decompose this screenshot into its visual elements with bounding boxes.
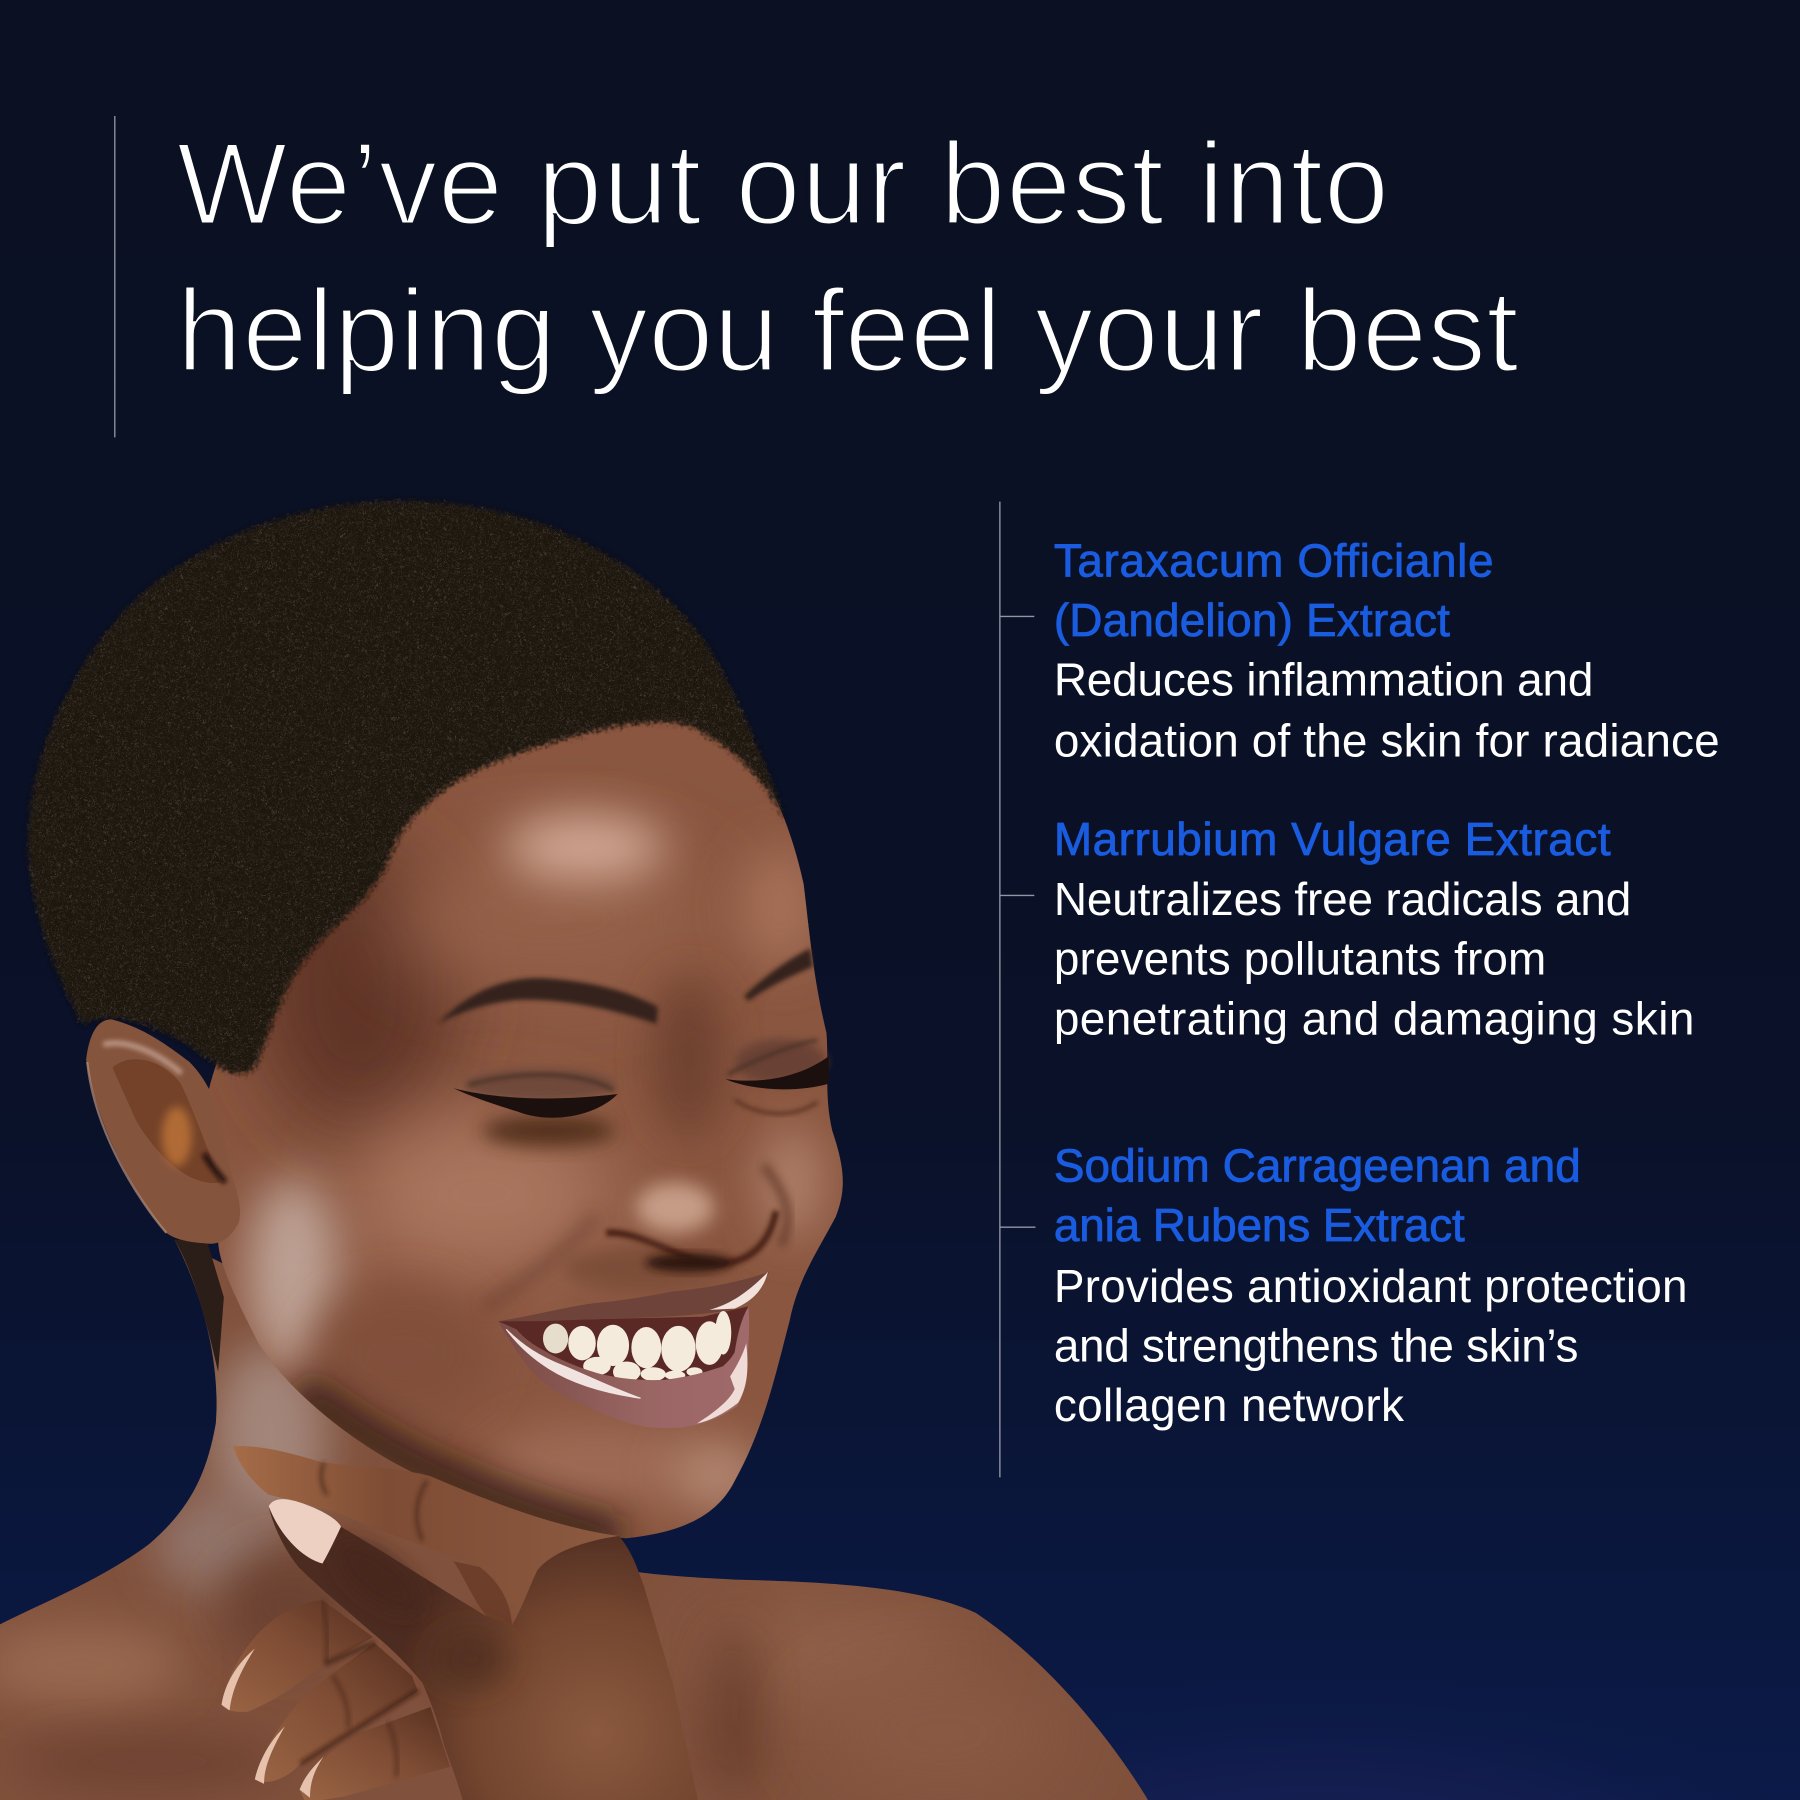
ingredient: dandelion extract: Taraxacum Officianle: [1054, 534, 1493, 586]
hand on chin: [222, 1446, 698, 1800]
right eye: [726, 1039, 829, 1113]
ingredient: sodium carrageenan: [1054, 1139, 1688, 1431]
lower lip: [498, 1306, 749, 1428]
title: We’ve put our best into: [177, 118, 1389, 249]
ingredient: dandelion extract: [1054, 534, 1720, 767]
ingredient: sodium carrageenan: ania Rubens Extract: [1054, 1199, 1465, 1251]
ingredients bracket: [1000, 502, 1035, 1477]
ingredient: marrubium vulgare: penetrating and damaging skin: [1054, 992, 1694, 1044]
ingredient: marrubium vulgare: Marrubium Vulgare Extract: [1054, 813, 1611, 865]
teeth: [543, 1311, 731, 1382]
under-chin shadow: [298, 1389, 620, 1538]
ingredient: marrubium vulgare: Neutralizes free radicals and: [1054, 873, 1631, 925]
fingernails: [222, 1648, 324, 1798]
ear: [86, 1019, 240, 1244]
left eye: [453, 1069, 618, 1147]
smile: [498, 1272, 769, 1428]
ingredient: marrubium vulgare: [1054, 813, 1694, 1044]
ingredient: sodium carrageenan: Sodium Carrageenan and: [1054, 1139, 1581, 1191]
ingredient: sodium carrageenan: collagen network: [1054, 1379, 1405, 1431]
philtrum: [562, 1248, 723, 1289]
ingredient: dandelion extract: (Dandelion) Extract: [1054, 594, 1450, 646]
neck and shoulders: [0, 1240, 1148, 1800]
lip gloss: [506, 1329, 641, 1398]
title: [177, 118, 1519, 396]
ingredient: sodium carrageenan: and strengthens the skin’s: [1054, 1319, 1578, 1371]
mouth interior: [498, 1306, 748, 1395]
face: [202, 689, 843, 1538]
palm and thumb: [269, 1500, 698, 1800]
heading rule: [114, 116, 116, 437]
ingredient: dandelion extract: Reduces inflammation and: [1054, 654, 1593, 706]
index finger: [233, 1446, 619, 1628]
lower fingers: [222, 1600, 450, 1800]
nose: [606, 1182, 776, 1272]
nasolabial fold: [482, 1215, 597, 1309]
portrait of smiling woman: [0, 482, 1148, 1800]
hair at nape: [174, 1240, 224, 1372]
ingredient: sodium carrageenan: Provides antioxidant protection: [1054, 1260, 1688, 1312]
upper lip: [498, 1272, 769, 1321]
thumb nail: [269, 1499, 341, 1564]
title: helping you feel your best: [177, 265, 1519, 396]
ingredient: marrubium vulgare: prevents pollutants from: [1054, 933, 1546, 985]
ingredient: dandelion extract: oxidation of the skin for radiance: [1054, 715, 1720, 767]
eyebrows: [437, 948, 813, 1024]
hair: [0, 482, 804, 1091]
closed eyes: [453, 1039, 829, 1147]
